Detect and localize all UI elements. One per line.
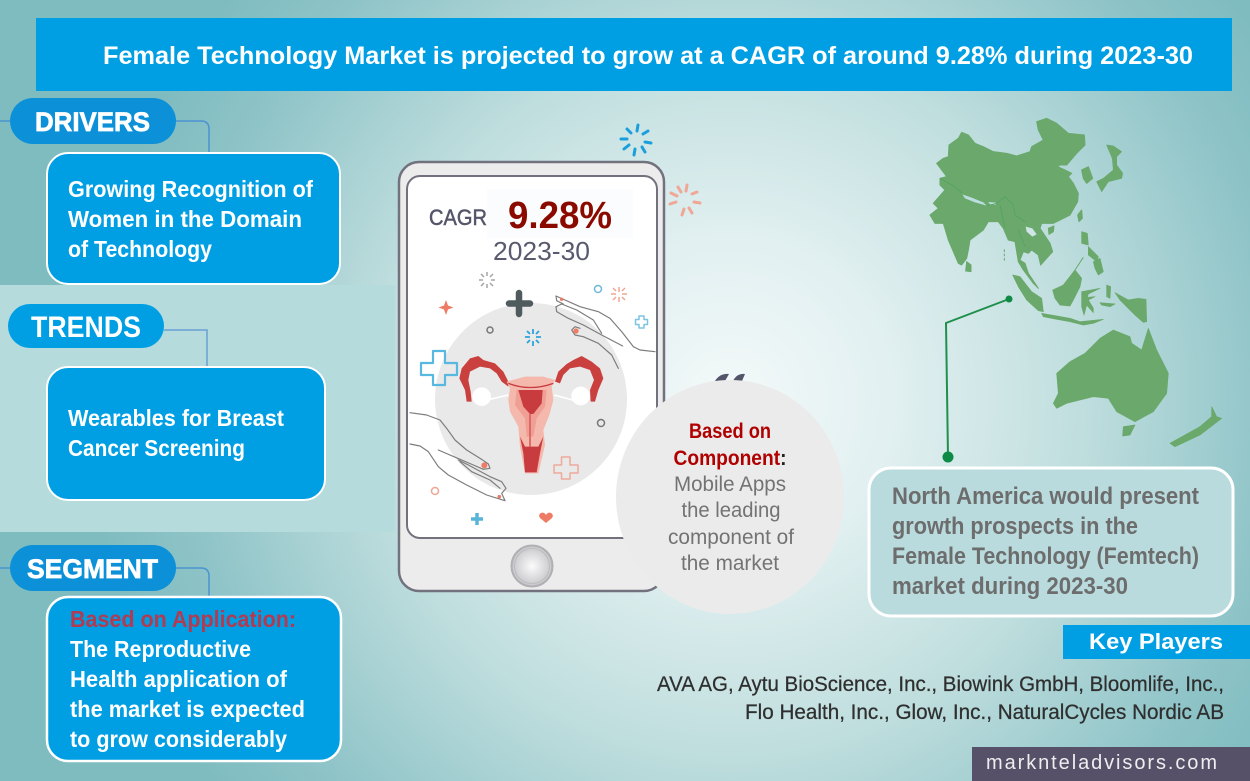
trends text: Wearables for Breast xyxy=(68,405,284,431)
map: mainland Asia xyxy=(930,118,1093,288)
panel: regional callout: Female Technology (Femtech) xyxy=(892,543,1199,570)
drivers text: Women in the Domain xyxy=(68,206,302,232)
segment text: the market is expected xyxy=(70,696,305,722)
icon: reproductive system xyxy=(459,356,603,473)
small decorative icons xyxy=(421,272,648,525)
phone body xyxy=(399,162,664,591)
panel: drivers xyxy=(0,98,340,284)
drivers text: Growing Recognition of xyxy=(68,176,313,202)
panel: regional callout xyxy=(869,468,1233,616)
segment heading: SEGMENT xyxy=(27,554,158,584)
callout: component: Based on xyxy=(689,420,771,443)
panel: regional callout: market during 2023-30 xyxy=(892,573,1128,600)
drivers heading: DRIVERS xyxy=(35,107,150,137)
title banner: Female Technology Market is projected to grow at a CAGR of around 9.28% during 2023-30 xyxy=(103,42,1193,70)
quote mark xyxy=(715,374,745,381)
icon: upper hand xyxy=(556,296,655,368)
key players list xyxy=(657,673,1224,724)
phone illustration xyxy=(399,162,664,591)
map: Asia Pacific xyxy=(930,118,1222,447)
trends box xyxy=(47,367,325,500)
map: Japan, Australia, New Zealand xyxy=(1053,145,1222,447)
highlight box behind value xyxy=(487,189,633,238)
drivers box xyxy=(47,153,340,284)
website badge xyxy=(972,747,1250,781)
icon: coral burst xyxy=(670,185,700,215)
icon: lower hand xyxy=(410,413,506,501)
segment text: Health application of xyxy=(70,666,287,692)
trends pill xyxy=(8,304,164,348)
trends band xyxy=(0,285,395,532)
trends text: Cancer Screening xyxy=(68,435,245,461)
map: Southeast Asian islands xyxy=(1004,232,1147,325)
key players list: AVA AG, Aytu BioScience, Inc., Biowink GmbH, Bloomlife, Inc., xyxy=(657,673,1224,696)
callout: component: Component: xyxy=(674,447,786,470)
segment box xyxy=(47,597,341,761)
key players list: Flo Health, Inc., Glow, Inc., NaturalCycles Nordic AB xyxy=(745,701,1224,724)
segment text: Based on Application: xyxy=(70,606,296,632)
icon: blue burst xyxy=(621,125,651,155)
title banner xyxy=(36,18,1232,91)
panel: regional callout: North America would present xyxy=(892,483,1199,510)
CAGR value: 9.28% xyxy=(508,195,612,237)
trends text xyxy=(68,405,284,461)
callout: component: Mobile Apps xyxy=(674,473,786,496)
trends heading: TRENDS xyxy=(31,311,141,344)
phone screen xyxy=(407,176,657,538)
website badge: marknteladvisors.com xyxy=(986,752,1217,774)
segment pill xyxy=(10,545,176,591)
segment text: to grow considerably xyxy=(70,726,287,752)
callout: component: the leading xyxy=(682,499,780,522)
map pointer line xyxy=(942,296,1012,462)
drivers text xyxy=(68,176,313,262)
callout: component: component of xyxy=(668,526,794,549)
segment text: The Reproductive xyxy=(70,636,251,662)
drivers pill xyxy=(10,98,176,144)
CAGR label: CAGR xyxy=(429,205,487,230)
home button xyxy=(512,546,552,586)
callout: component xyxy=(616,380,844,614)
CAGR period: 2023-30 xyxy=(493,236,590,266)
key players heading xyxy=(1063,625,1250,659)
key players heading: Key Players xyxy=(1089,629,1223,654)
panel: regional callout: growth prospects in the xyxy=(892,513,1138,540)
drivers text: of Technology xyxy=(68,236,212,262)
segment text xyxy=(70,606,305,752)
panel: trends xyxy=(8,304,325,500)
panel: segment xyxy=(0,545,341,761)
gray disc xyxy=(435,303,627,495)
callout: component: the market xyxy=(681,552,779,575)
